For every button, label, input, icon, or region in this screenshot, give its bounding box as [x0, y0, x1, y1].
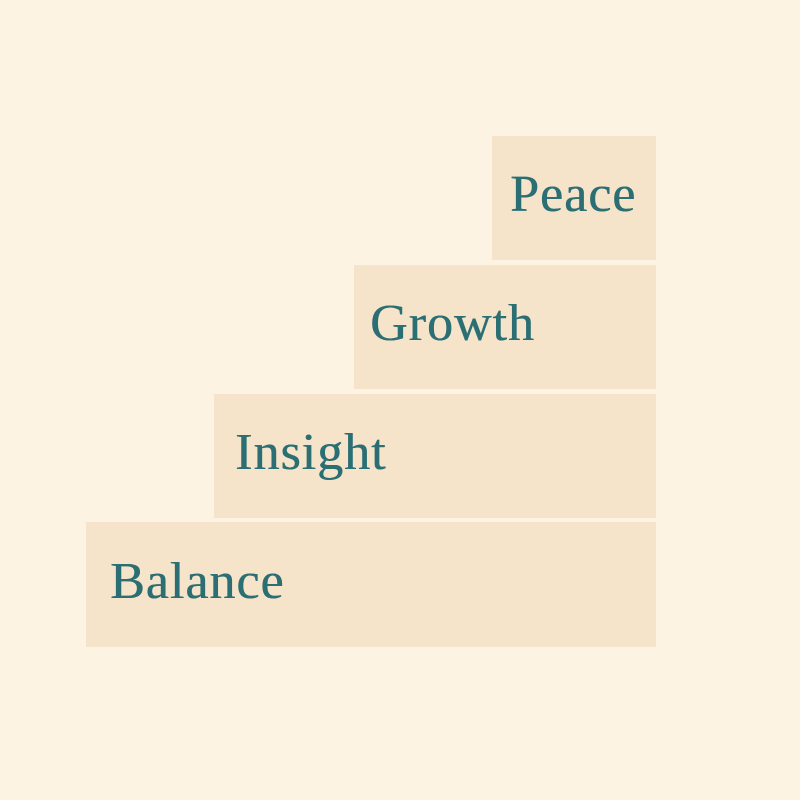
step: Balance — [86, 522, 656, 647]
label: Insight: Insight — [235, 424, 386, 481]
step: Peace — [492, 136, 656, 260]
step: Insight — [214, 394, 656, 518]
label: Growth: Growth — [370, 295, 535, 352]
step: Growth — [354, 265, 656, 389]
label: Balance: Balance — [110, 553, 284, 610]
label: Peace: Peace — [510, 166, 636, 223]
